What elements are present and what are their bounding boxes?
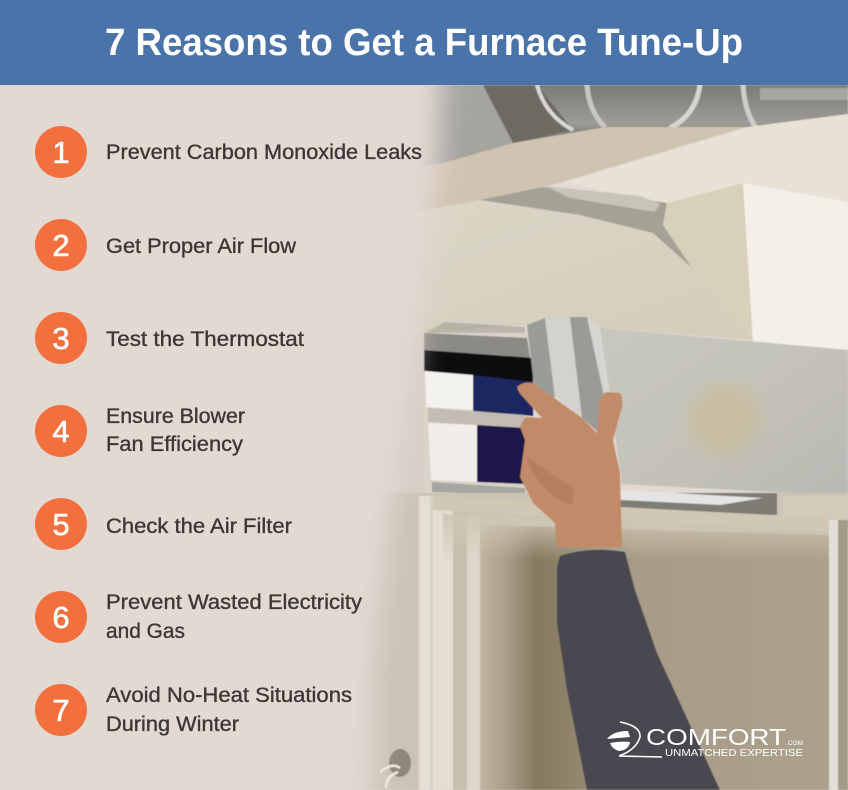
logo domain: .COM	[786, 740, 803, 747]
reason 2	[35, 219, 297, 271]
textured side wall	[663, 183, 753, 342]
reason 7: During Winter	[106, 713, 239, 736]
logo mark	[607, 722, 662, 757]
plaster trim	[480, 187, 692, 268]
reason 3	[35, 312, 304, 364]
ceiling duct	[424, 85, 848, 166]
reason 7: 7	[52, 693, 70, 728]
reason 5: Check the Air Filter	[106, 515, 292, 538]
logo tagline: UNMATCHED EXPERTISE	[665, 748, 803, 759]
white box	[743, 183, 848, 350]
reason 1: 1	[52, 135, 70, 170]
reason 4: Fan Efficiency	[106, 433, 244, 456]
wall smudge	[424, 322, 525, 333]
reason 6: Prevent Wasted Electricity	[106, 591, 363, 614]
reason 3: 3	[52, 321, 70, 356]
header bar	[0, 0, 848, 85]
reason list	[35, 126, 422, 736]
title: 7 Reasons to Get a Furnace Tune-Up	[105, 22, 743, 64]
sleeve	[557, 550, 720, 790]
hand shading	[525, 455, 575, 505]
reason 4: Ensure Blower	[106, 405, 245, 428]
photo: technician replacing furnace filter	[340, 85, 848, 790]
furnace cabinet	[340, 490, 848, 790]
galvanized filter panel	[600, 328, 848, 496]
logo	[607, 722, 803, 759]
reason 2: Get Proper Air Flow	[106, 235, 297, 258]
folded panel edge	[527, 317, 610, 432]
reason 1	[35, 126, 422, 178]
logo wordmark: COMFORT	[646, 724, 786, 750]
hand	[517, 382, 622, 547]
reason 7	[35, 684, 352, 736]
beam under duct	[424, 126, 746, 209]
reason 5: 5	[52, 507, 70, 542]
wall	[416, 200, 751, 340]
reason 6: and Gas	[106, 620, 185, 643]
reason 4: 4	[52, 414, 70, 449]
reason 4	[35, 405, 245, 457]
filter slot	[424, 333, 533, 495]
reason 5	[35, 498, 292, 550]
ceiling	[563, 114, 848, 203]
reason 1: Prevent Carbon Monoxide Leaks	[106, 141, 422, 164]
reason 3: Test the Thermostat	[106, 328, 304, 351]
door handle	[380, 749, 411, 788]
reason 2: 2	[52, 228, 70, 263]
reason 6: 6	[52, 600, 70, 635]
left wall strip	[340, 330, 424, 500]
reason 6	[35, 591, 363, 643]
reason 7: Avoid No-Heat Situations	[106, 684, 352, 707]
